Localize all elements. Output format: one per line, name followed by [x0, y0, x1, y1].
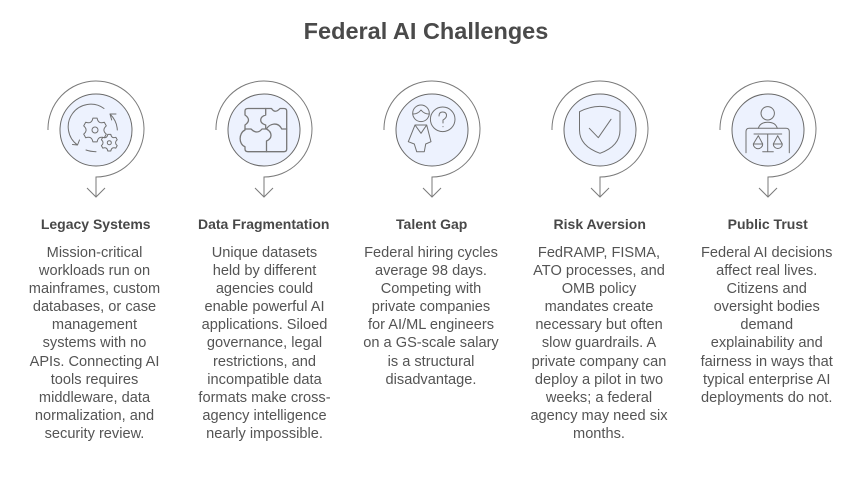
text block: months. [573, 426, 625, 442]
text block: incompatible data [207, 372, 322, 388]
text block [530, 245, 668, 442]
panel: talent gap [363, 80, 499, 388]
text block: normalization, and [35, 408, 154, 424]
heading: Talent Gap [396, 216, 467, 232]
text block: Mission-critical [47, 245, 142, 261]
text block: OMB policy [562, 281, 636, 297]
text block: middleware, data [39, 390, 150, 406]
text block [700, 245, 833, 406]
text block: average 98 days. [375, 263, 487, 279]
text block: systems with no [43, 335, 146, 351]
text block: deploy a pilot in two [535, 372, 663, 388]
heading: Risk Aversion [554, 216, 646, 232]
heading: Public Trust [728, 216, 808, 232]
text block: for AI/ML engineers [368, 317, 494, 333]
icon: gears with cycle arrows [48, 80, 144, 198]
heading: Legacy Systems [41, 216, 151, 232]
text block: applications. Siloed [202, 317, 327, 333]
panel: legacy systems [29, 80, 160, 442]
text block: databases, or case [33, 299, 156, 315]
text block: Federal hiring cycles [364, 245, 498, 261]
text block [363, 245, 499, 388]
text block: fairness in ways that [701, 354, 833, 370]
icon: shield with check [552, 80, 648, 198]
text block: nearly impossible. [206, 426, 323, 442]
text block: mandates create [545, 299, 653, 315]
text block: workloads run on [39, 263, 150, 279]
text block: security review. [45, 426, 144, 442]
text block: governance, legal [207, 335, 322, 351]
panel: risk aversion [530, 80, 668, 442]
text block: enable powerful AI [204, 299, 325, 315]
text block: Unique datasets [212, 245, 317, 261]
text block: is a structural [388, 354, 474, 370]
text block: agency intelligence [202, 408, 327, 424]
text block: ATO processes, and [533, 263, 665, 279]
text block: disadvantage. [386, 372, 476, 388]
icon: person behind scales [720, 80, 816, 198]
text block: necessary but often [535, 317, 663, 333]
text block: Competing with [381, 281, 481, 297]
heading: Data Fragmentation [198, 216, 329, 232]
text block: demand [740, 317, 793, 333]
text block: on a GS-scale salary [363, 335, 499, 351]
icon: puzzle [216, 80, 312, 198]
text block: mainframes, custom [29, 281, 160, 297]
text block: weeks; a federal [546, 390, 652, 406]
text block: agency may need six [530, 408, 668, 424]
text block: APIs. Connecting AI [30, 354, 159, 370]
text block: FedRAMP, FISMA, [538, 245, 660, 261]
text block: restrictions, and [213, 354, 316, 370]
text block [29, 245, 160, 442]
text block: management [52, 317, 137, 333]
text block: oversight bodies [714, 299, 820, 315]
text block: affect real lives. [716, 263, 817, 279]
text block [198, 245, 331, 442]
text block: typical enterprise AI [703, 372, 830, 388]
text block: Citizens and [727, 281, 807, 297]
text block: agencies could [216, 281, 313, 297]
panel: data fragmentation [198, 80, 331, 442]
text block: private company can [532, 354, 666, 370]
text block: private companies [372, 299, 490, 315]
text block: held by different [213, 263, 316, 279]
title: Federal AI Challenges [304, 18, 548, 44]
text block: deployments do not. [701, 390, 832, 406]
icon: person with question mark [384, 80, 480, 198]
text block: formats make cross- [198, 390, 331, 406]
text block: explainability and [711, 335, 823, 351]
text block: Federal AI decisions [701, 245, 832, 261]
panel: public trust [700, 80, 833, 406]
text block: tools requires [51, 372, 138, 388]
text block: slow guardrails. A [542, 335, 656, 351]
